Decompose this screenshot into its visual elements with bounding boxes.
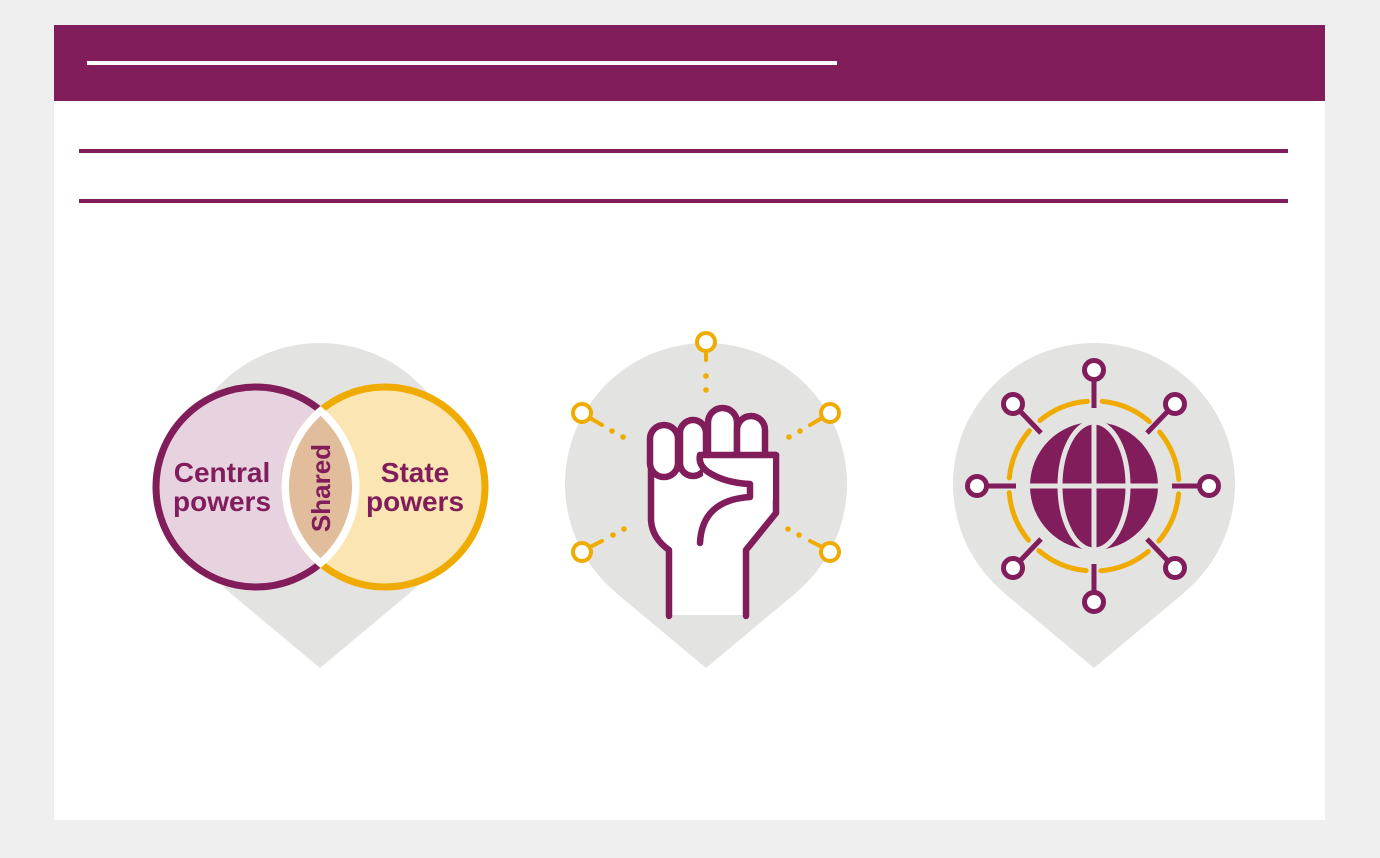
- panel: globe: [953, 343, 1235, 668]
- pin background: [953, 343, 1235, 668]
- icon: globe: [1028, 420, 1160, 552]
- circle: state powers: [285, 387, 485, 587]
- icon: fist: [650, 408, 776, 616]
- spokes and nodes: [968, 360, 1218, 612]
- title placeholder line: [87, 61, 837, 65]
- subtitle line 2: [79, 199, 1288, 203]
- label: central powers: Central: [174, 457, 270, 488]
- label: state powers: State: [381, 457, 449, 488]
- pin background: [179, 343, 461, 668]
- header bar: [54, 25, 1325, 101]
- pin background: [565, 343, 847, 668]
- subtitle line 1: [79, 149, 1288, 153]
- circle: central powers: [156, 387, 356, 587]
- dashed ring: [1009, 401, 1179, 571]
- panel: venn diagram: powers: [366, 486, 464, 517]
- panel: venn diagram: [156, 343, 488, 668]
- shared lens: [282, 406, 360, 568]
- label: shared: Shared: [306, 444, 336, 532]
- connector nodes: [573, 333, 839, 561]
- panel: venn diagram: powers: [173, 486, 271, 517]
- panel: fist: [565, 333, 847, 668]
